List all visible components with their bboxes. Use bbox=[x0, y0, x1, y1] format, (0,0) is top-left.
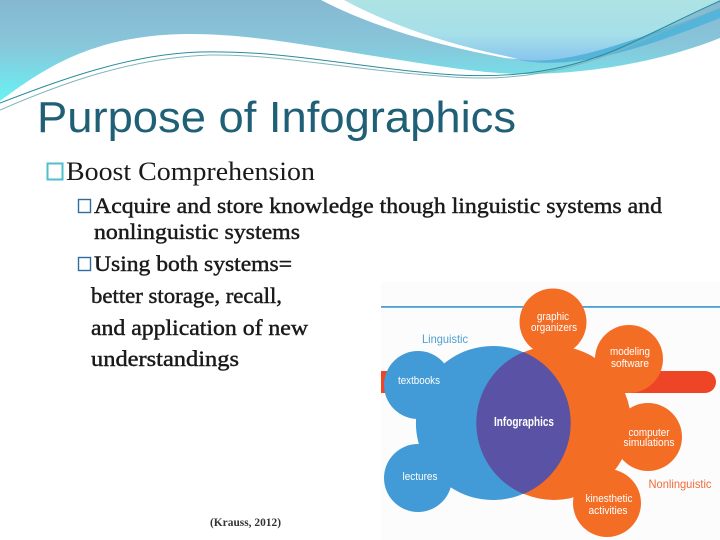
header wave banner bbox=[0, 0, 720, 110]
nonlinguistic circles bbox=[477, 288, 682, 537]
diagram labels: textbooks bbox=[398, 375, 440, 387]
sub-bullet: Using both systems bbox=[78, 251, 308, 371]
diagram labels: Infographics bbox=[494, 415, 554, 429]
diagram labels: modeling bbox=[610, 346, 650, 358]
diagram labels: computer bbox=[628, 427, 670, 439]
diagram labels: organizers bbox=[531, 322, 577, 334]
diagram labels: graphic bbox=[537, 311, 569, 323]
diagram labels: lectures bbox=[402, 471, 438, 483]
sub-bullet: Acquire and store knowledge: nonlinguistic systems bbox=[94, 219, 300, 244]
sub-bullet: Acquire and store knowledge bbox=[78, 193, 662, 244]
diagram labels: simulations bbox=[624, 437, 675, 449]
diagram: infographics venn bbox=[381, 282, 720, 540]
linguistic circles bbox=[384, 346, 525, 512]
sub-bullet: Using both systems: and application of new bbox=[91, 315, 308, 340]
diagram labels: kinesthetic bbox=[586, 493, 633, 505]
sub-bullet: Acquire and store knowledge: Acquire and store knowledge though linguistic systems and bbox=[94, 193, 662, 218]
sub-bullet: Using both systems: understandings bbox=[91, 346, 239, 371]
sub-bullet: Using both systems: Using both systems= bbox=[94, 251, 292, 276]
red bar bbox=[381, 371, 716, 393]
lens overlap bbox=[476, 352, 571, 494]
citation: (Krauss, 2012) bbox=[210, 515, 281, 529]
bullet: Boost Comprehension: Boost Comprehension bbox=[66, 157, 315, 186]
diagram labels bbox=[398, 311, 712, 517]
diagram labels: software bbox=[611, 358, 649, 370]
diagram labels: activities bbox=[588, 505, 628, 517]
sub-bullet: Using both systems: better storage, recall, bbox=[91, 283, 282, 308]
diagram labels: Nonlinguistic bbox=[648, 477, 712, 491]
diagram labels: Linguistic bbox=[422, 332, 468, 346]
title: Purpose of Infographics bbox=[37, 93, 516, 142]
